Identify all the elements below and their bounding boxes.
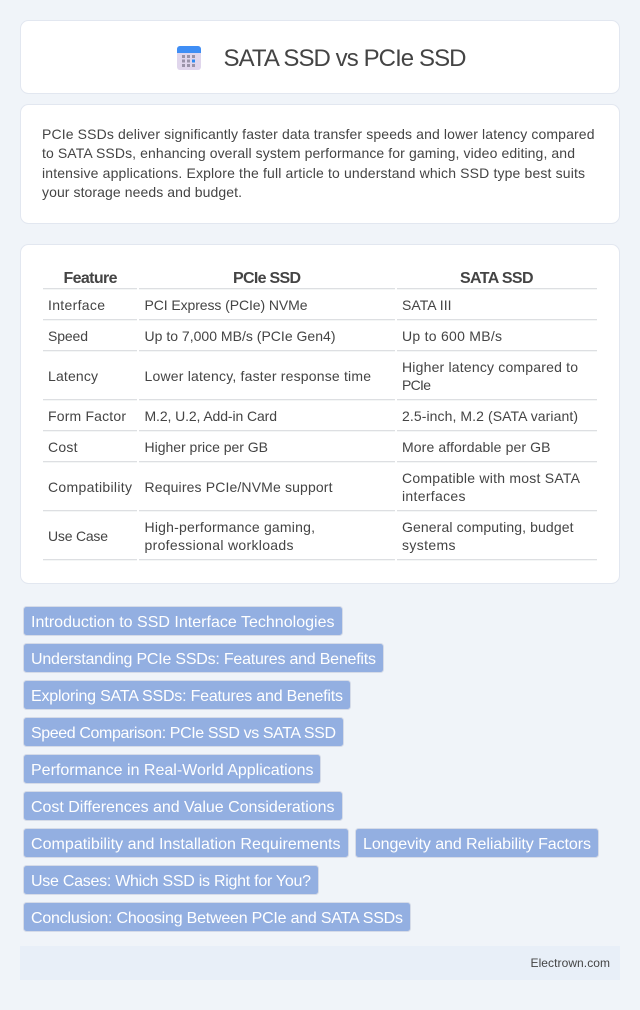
- link chip: use cases: [24, 866, 318, 894]
- row: Form Factor: Form Factor: [48, 408, 126, 424]
- link chip: performance: Performance in Real-World Applications: [31, 762, 314, 779]
- row: Form Factor: M.2, U.2, Add-in Card: [144, 408, 277, 424]
- row: Cost: [48, 439, 550, 455]
- row: Speed: Up to 600 MB/s: [402, 328, 502, 344]
- link chip: introduction: [24, 606, 342, 636]
- row: Cost: More affordable per GB: [402, 439, 550, 455]
- link chip: performance: [24, 754, 320, 784]
- link chip: longevity: [356, 828, 598, 858]
- row: Latency: [48, 359, 578, 393]
- link chip: use cases: Use Cases: Which SSD is Right for You?: [31, 873, 311, 890]
- icon: calendar: [177, 46, 201, 70]
- intro paragraph: [42, 126, 594, 200]
- link chip: longevity: Longevity and Reliability Factors: [363, 836, 591, 853]
- row: Interface: SATA III: [402, 297, 452, 313]
- row: Form Factor: [48, 408, 578, 424]
- table header: SATA SSD: SATA SSD: [460, 270, 534, 287]
- row: Use Case: High-performance gaming,: [144, 519, 315, 535]
- row: Interface: [48, 297, 452, 313]
- row: Latency: Higher latency compared to: [402, 359, 578, 375]
- link chip: understanding PCIe: Understanding PCIe SSDs: Features and Benefits: [31, 651, 376, 668]
- intro paragraph: your storage needs and budget.: [42, 184, 242, 200]
- row: Compatibility: Compatible with most SATA: [402, 470, 581, 486]
- row: Cost: Cost: [48, 439, 78, 455]
- row: Use Case: systems: [402, 537, 456, 553]
- link chip: compatibility: [24, 828, 348, 858]
- title card: [20, 20, 620, 94]
- row: Compatibility: Requires PCIe/NVMe support: [144, 479, 333, 495]
- link chip: cost: Cost Differences and Value Considerations: [31, 799, 334, 816]
- row: Compatibility: [48, 470, 581, 504]
- row: Use Case: professional workloads: [144, 537, 294, 553]
- row: Form Factor: 2.5-inch, M.2 (SATA variant): [402, 408, 578, 424]
- row: Interface: PCI Express (PCIe) NVMe: [144, 297, 308, 313]
- row: Latency: Latency: [48, 368, 98, 384]
- intro paragraph: intensive applications. Explore the full article to understand which SSD type best suits: [42, 165, 585, 181]
- table header: Feature: Feature: [64, 270, 118, 287]
- link chip: introduction: Introduction to SSD Interface Technologies: [31, 614, 334, 631]
- intro paragraph: PCIe SSDs deliver significantly faster data transfer speeds and lower latency compared: [42, 126, 594, 142]
- row: Use Case: [48, 519, 574, 553]
- row: Compatibility: Compatibility: [48, 479, 132, 495]
- row: Compatibility: interfaces: [402, 488, 466, 504]
- table of contents links: [24, 606, 598, 932]
- link chip: conclusion: [24, 902, 410, 932]
- link chip: exploring SATA: Exploring SATA SSDs: Features and Benefits: [31, 688, 343, 705]
- intro paragraph: to SATA SSDs, enhancing overall system performance for gaming, video editing, and: [42, 145, 575, 161]
- table header: PCIe SSD: PCIe SSD: [233, 270, 301, 287]
- intro text panel: [20, 104, 620, 224]
- link chip: compatibility: Compatibility and Installation Requirements: [31, 836, 340, 853]
- link chip: conclusion: Conclusion: Choosing Between PCIe and SATA SSDs: [31, 910, 403, 927]
- row: Speed: [48, 328, 502, 344]
- row: Cost: Higher price per GB: [144, 439, 268, 455]
- link chip: speed comparison: Speed Comparison: PCIe SSD vs SATA SSD: [31, 725, 336, 742]
- footer credit: Electrown.com: [530, 956, 610, 970]
- row: Speed: Up to 7,000 MB/s (PCIe Gen4): [144, 328, 336, 344]
- title: SATA SSD vs PCIe SSD: [224, 45, 466, 72]
- link chip: understanding PCIe: [24, 644, 384, 672]
- row: Latency: Lower latency, faster response time: [144, 368, 371, 384]
- row: Speed: Speed: [48, 328, 88, 344]
- row: Use Case: General computing, budget: [402, 519, 574, 535]
- row: Latency: PCIe: [402, 377, 431, 393]
- link chip: exploring SATA: [24, 680, 350, 710]
- row: Interface: Interface: [48, 297, 105, 313]
- link chip: speed comparison: [24, 718, 344, 746]
- row: Use Case: Use Case: [48, 528, 108, 544]
- comparison table panel: [20, 244, 620, 584]
- link chip: cost: [24, 792, 342, 820]
- footer bar: [20, 946, 620, 980]
